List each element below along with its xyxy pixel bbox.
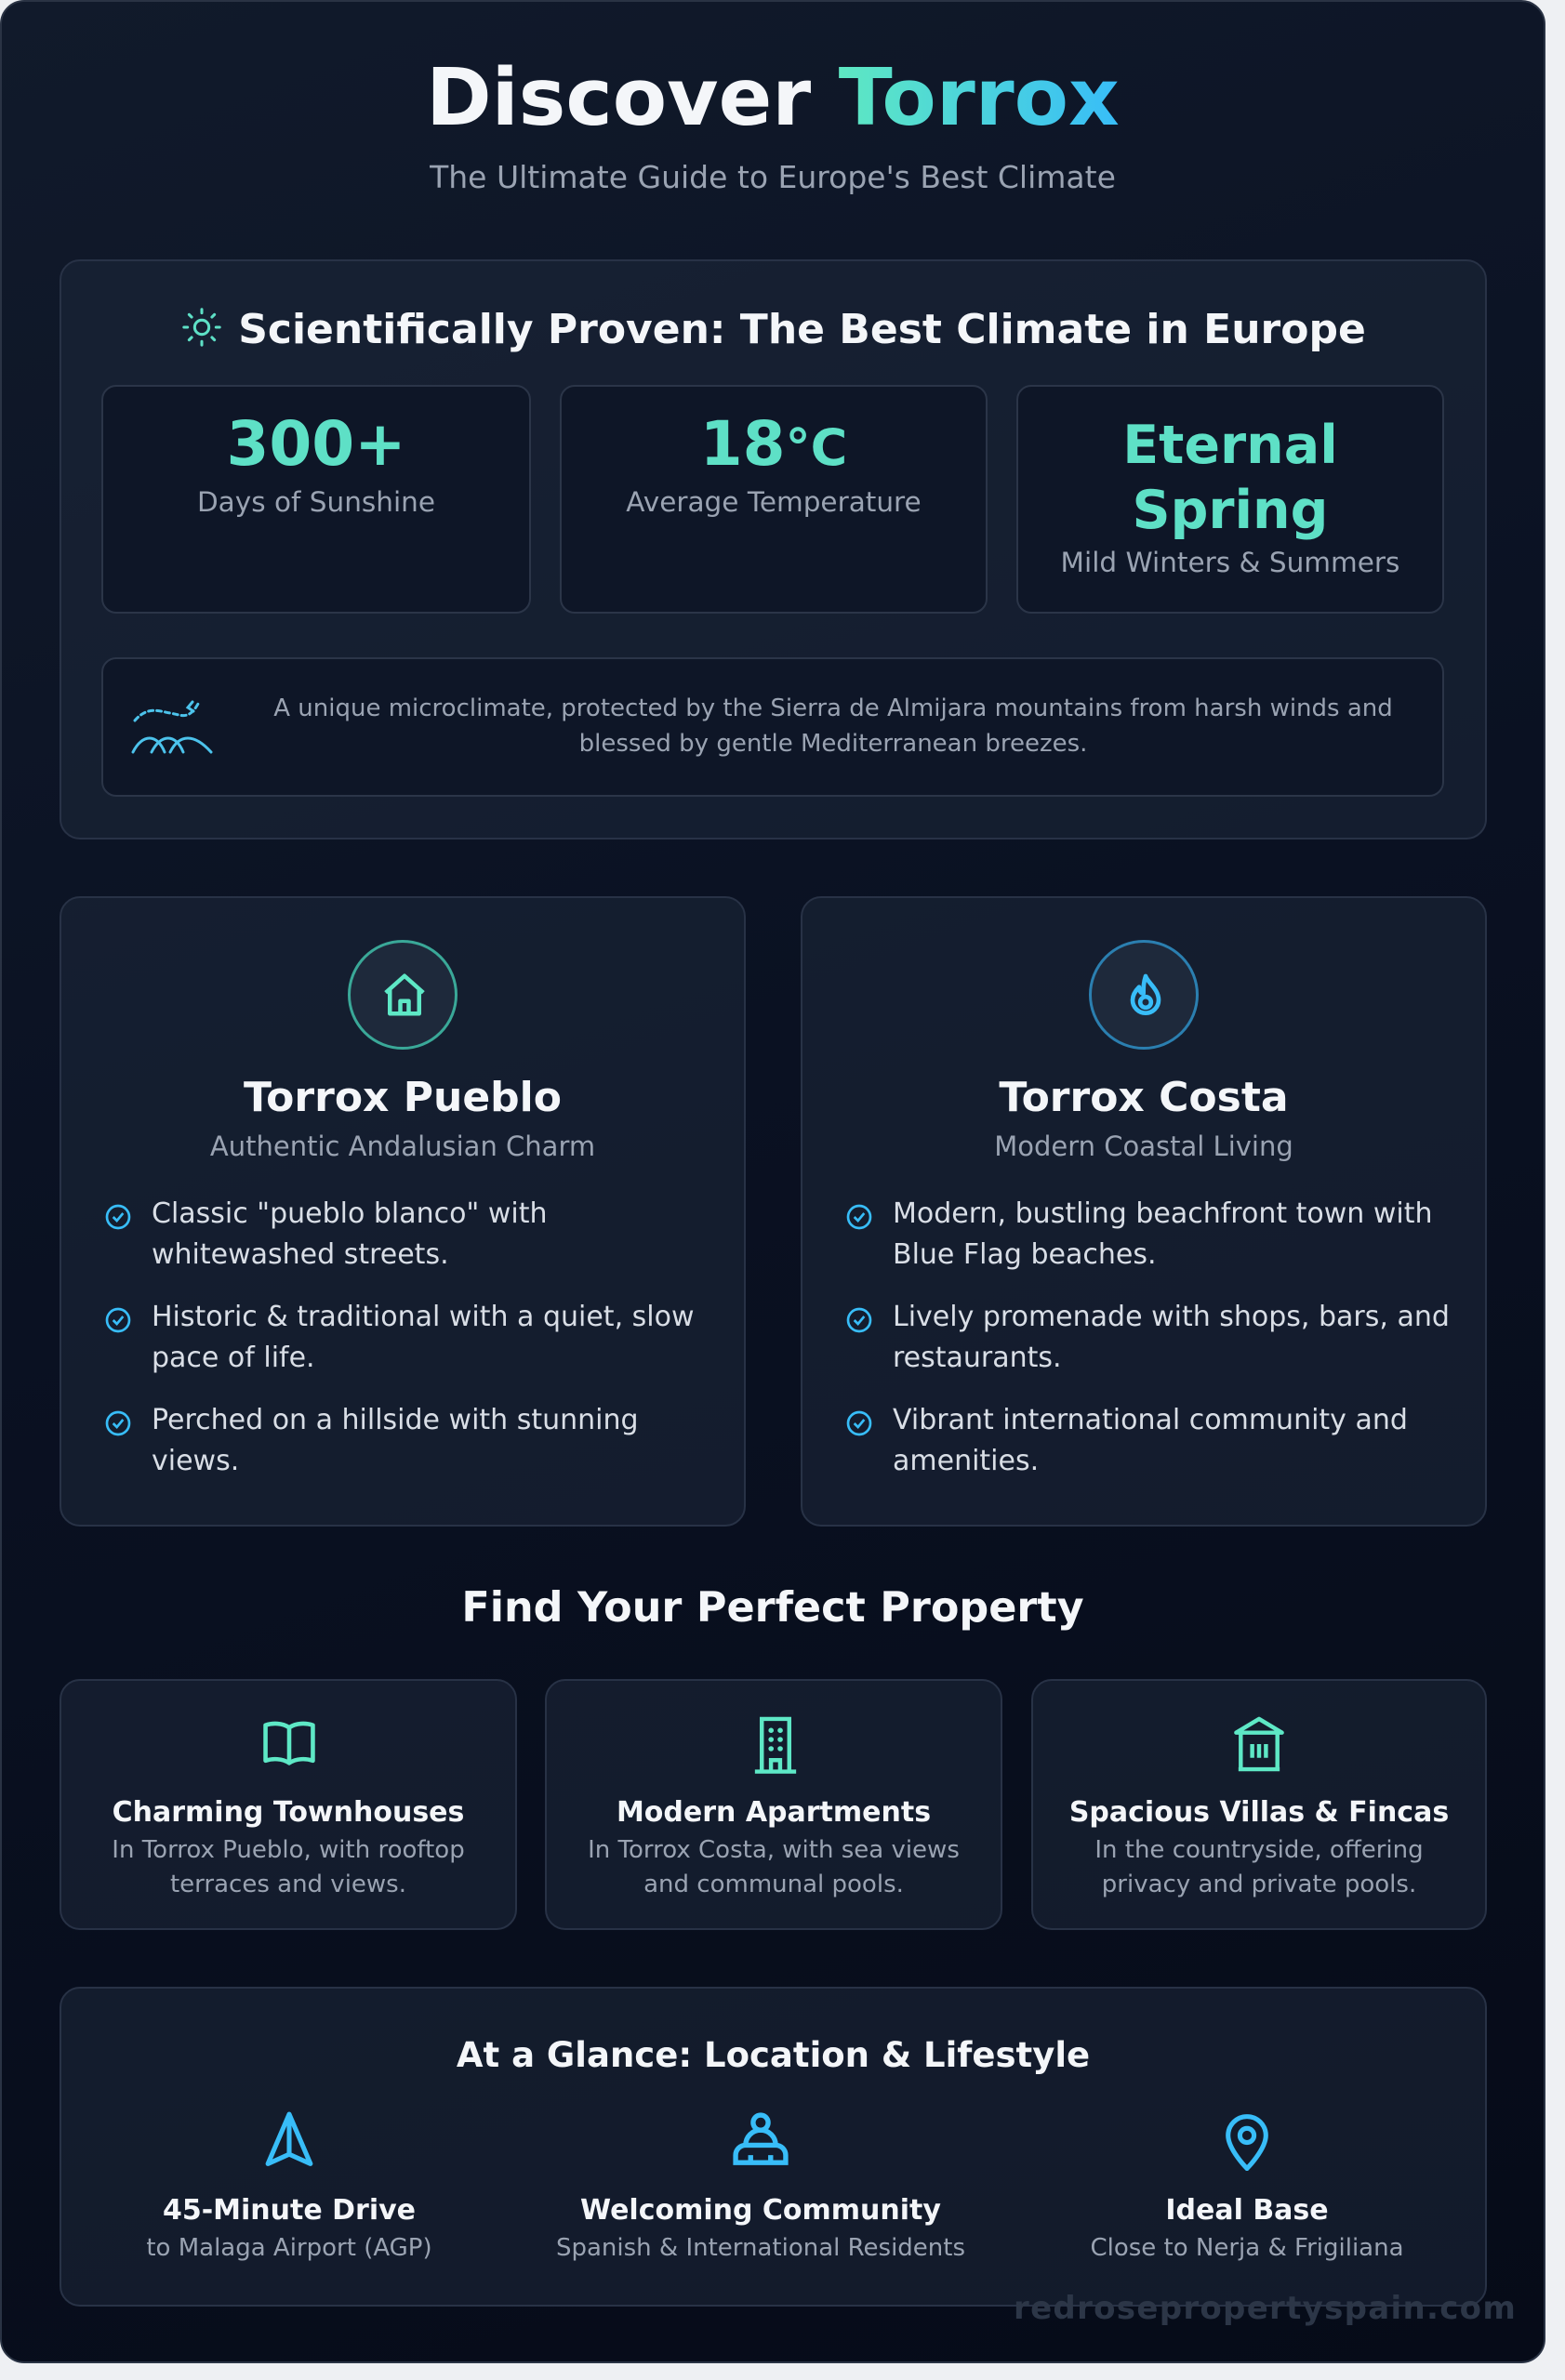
title: Charming Townhouses <box>113 1796 464 1829</box>
bullet list: Classic "pueblo blanco" with whitewashed streets. <box>152 1197 547 1271</box>
description <box>588 1836 960 1898</box>
item: drive <box>146 2112 432 2262</box>
panel: Torrox Costa <box>801 896 1487 1527</box>
stat: eternal spring: Spring <box>1133 480 1328 541</box>
heading: find property: Find Your Perfect Property <box>461 1584 1084 1632</box>
icon: mountains and breeze <box>131 700 213 754</box>
subheading: Modern Coastal Living <box>994 1130 1293 1162</box>
card: villas <box>1031 1679 1487 1930</box>
text: microclimate: blessed by gentle Mediterranean breezes. <box>579 730 1087 758</box>
icon: building <box>755 1716 796 1774</box>
item: ideal base: Ideal Base <box>1165 2194 1329 2227</box>
description <box>112 1836 465 1898</box>
description <box>1094 1836 1424 1898</box>
item: community: Spanish & International Residents <box>556 2234 965 2262</box>
item: ideal base: Close to Nerja & Frigiliana <box>1090 2234 1404 2262</box>
icon: map pin <box>1226 2114 1268 2171</box>
icon: villa <box>1234 1716 1284 1772</box>
item: community <box>556 2112 965 2262</box>
title: Discover Torrox <box>426 52 1120 144</box>
subtitle: The Ultimate Guide to Europe's Best Climate <box>430 159 1116 195</box>
stat: temperature <box>560 385 988 614</box>
item: community: Welcoming Community <box>580 2194 941 2227</box>
bullet list: Perched on a hillside with stunning views. <box>152 1404 639 1477</box>
stat: sunshine <box>101 385 531 614</box>
heading: at a glance: At a Glance: Location & Lifestyle <box>457 2035 1090 2075</box>
title: Spacious Villas & Fincas <box>1069 1796 1449 1829</box>
description: privacy and private pools. <box>1102 1871 1416 1898</box>
description: In Torrox Costa, with sea views <box>588 1836 960 1864</box>
stat: eternal spring: Mild Winters & Summers <box>1061 547 1399 578</box>
item: ideal base <box>1090 2114 1404 2262</box>
card: apartments <box>545 1679 1002 1930</box>
card: townhouses <box>60 1679 517 1930</box>
stat: sunshine: Days of Sunshine <box>197 486 435 518</box>
panel: climate <box>60 259 1487 840</box>
panel: Torrox Pueblo <box>60 896 746 1527</box>
description: terraces and views. <box>170 1871 406 1898</box>
heading: Torrox Pueblo: Torrox Pueblo <box>244 1074 562 1121</box>
stat: sunshine: 300+ <box>226 408 406 480</box>
panel: at a glance <box>60 1987 1487 2307</box>
watermark: redrosepropertyspain.com <box>1014 2290 1517 2327</box>
description: In the countryside, offering <box>1094 1836 1424 1864</box>
bullet list: Lively promenade with shops, bars, and restaurants. <box>893 1301 1450 1374</box>
item: drive: to Malaga Airport (AGP) <box>146 2234 432 2262</box>
icon: sun <box>182 308 221 347</box>
bullet list: Vibrant international community and amenities. <box>893 1404 1408 1477</box>
stat: temperature: 18°C <box>700 408 847 480</box>
text: microclimate <box>273 694 1393 758</box>
icon: house <box>348 940 458 1050</box>
heading: climate: Scientifically Proven: The Best Climate in Europe <box>238 306 1366 353</box>
description: and communal pools. <box>643 1871 904 1898</box>
bullet list: Historic & traditional with a quiet, slow pace of life. <box>152 1301 694 1374</box>
icon: people <box>733 2112 789 2165</box>
bullet list <box>846 1197 1450 1477</box>
bullet list: Modern, bustling beachfront town with Blue Flag beaches. <box>893 1197 1432 1271</box>
heading: Torrox Costa: Torrox Costa <box>999 1074 1289 1121</box>
text: microclimate: A unique microclimate, protected by the Sierra de Almijara mountains from harsh winds and <box>273 694 1393 722</box>
icon: navigation <box>266 2112 312 2166</box>
microclimate callout <box>101 657 1444 797</box>
icon: book <box>263 1722 315 1765</box>
description: In Torrox Pueblo, with rooftop <box>112 1836 465 1864</box>
stat: temperature: Average Temperature <box>626 486 922 518</box>
bullet list <box>106 1197 694 1477</box>
stat: eternal spring <box>1016 385 1444 614</box>
item: drive: 45-Minute Drive <box>163 2194 416 2227</box>
icon: flame <box>1089 940 1199 1050</box>
title: Modern Apartments <box>617 1796 931 1829</box>
stat: eternal spring: Eternal <box>1122 415 1338 476</box>
subheading: Authentic Andalusian Charm <box>210 1130 595 1162</box>
